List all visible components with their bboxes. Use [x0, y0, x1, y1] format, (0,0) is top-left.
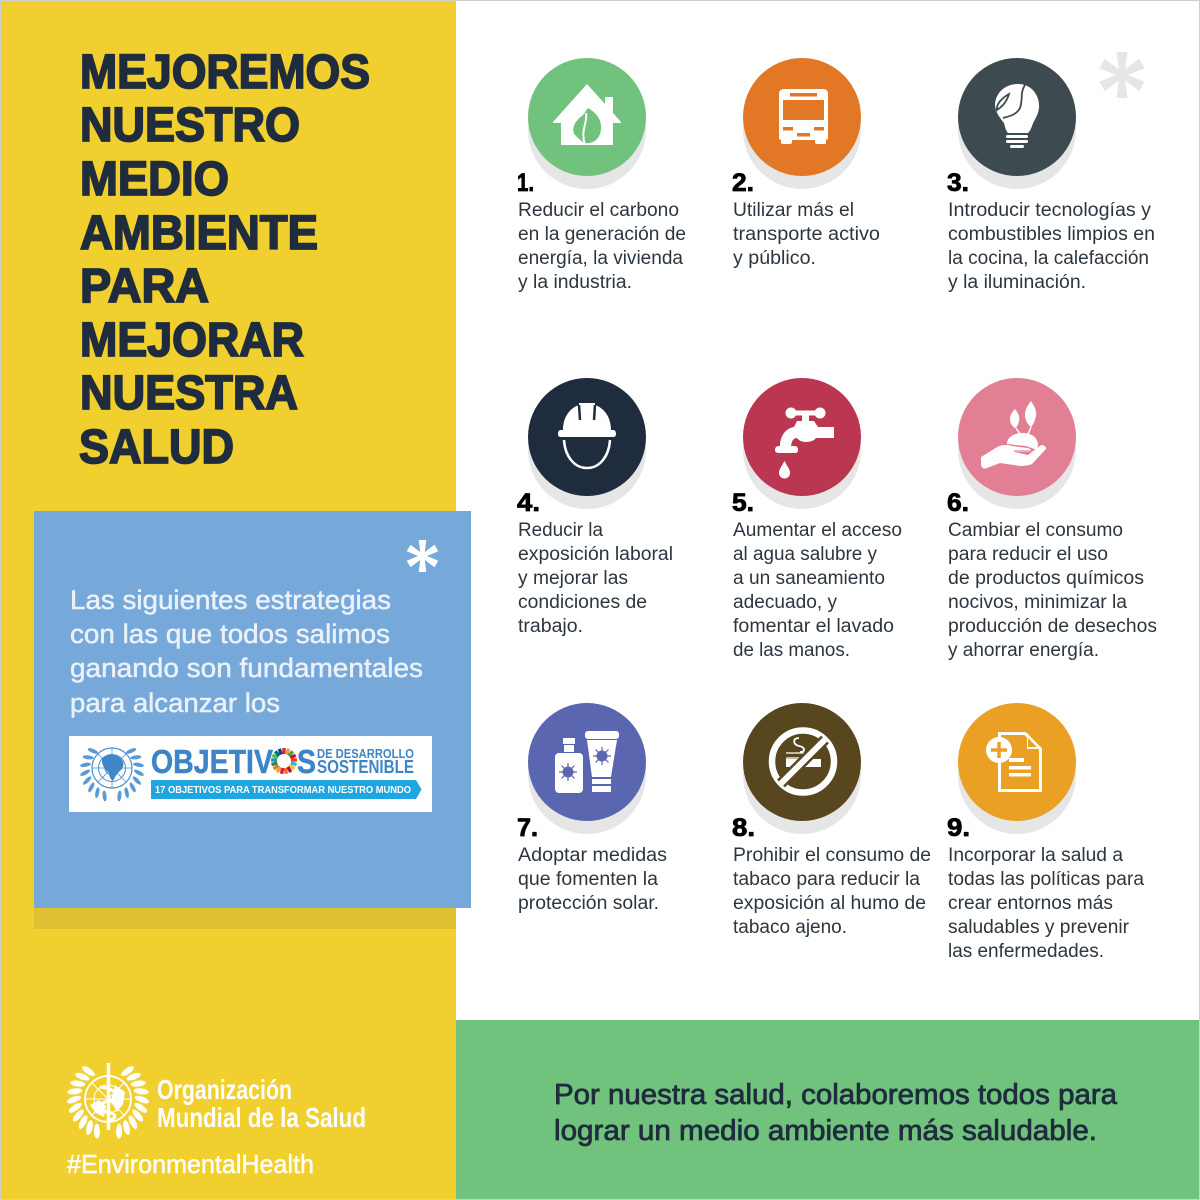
intro text: con las que todos salimos — [70, 619, 390, 649]
text 5: de las manos. — [733, 640, 850, 661]
text 8: Prohibir el consumo de — [733, 845, 931, 866]
text 5: Aumentar el acceso — [733, 520, 902, 541]
icon: document with medical cross — [986, 733, 1042, 790]
logo arrow ribbon — [151, 780, 422, 799]
title: MEJORAR — [80, 314, 304, 367]
title — [79, 46, 370, 474]
text 8 — [733, 845, 931, 938]
item 4: workplace exposure — [517, 378, 673, 637]
icon: house with leaf — [553, 84, 621, 145]
intro text: para alcanzar los — [70, 688, 280, 718]
text 5: adecuado, y — [733, 592, 837, 613]
text 9: todas las políticas para — [948, 869, 1144, 890]
text 6: de productos químicos — [948, 568, 1144, 589]
icon: leaf light bulb — [995, 84, 1039, 148]
text 7: Adoptar medidas — [518, 845, 667, 866]
icon: hand holding seedling — [981, 401, 1046, 469]
icon: sunscreen bottle and tube — [555, 731, 619, 793]
text 1: y la industria. — [518, 272, 632, 293]
icon: UN emblem — [79, 747, 145, 802]
logo wordmark: S — [297, 743, 316, 780]
text 3: y la iluminación. — [948, 272, 1086, 293]
logo arrow ribbon: 17 OBJETIVOS PARA TRANSFORMAR NUESTRO MUNDO — [155, 785, 411, 796]
text 8: tabaco ajeno. — [733, 917, 847, 938]
item 7: sun protection — [517, 703, 667, 914]
title: SALUD — [79, 421, 234, 474]
number 4: 4. — [517, 489, 540, 517]
title: NUESTRA — [80, 367, 298, 420]
text 4: exposición laboral — [518, 544, 673, 565]
text 2: Utilizar más el — [733, 200, 854, 221]
item 3: clean technology — [947, 58, 1155, 293]
number 3: 3. — [947, 169, 969, 197]
number 7: 7. — [517, 814, 538, 842]
text 1 — [518, 200, 686, 293]
logo wordmark: SOSTENIBLE — [317, 757, 414, 777]
item 6: chemicals and waste — [947, 378, 1157, 661]
title: AMBIENTE — [80, 207, 318, 260]
text 3 — [948, 200, 1155, 293]
logo wordmark — [151, 743, 414, 780]
item 5: water and sanitation — [732, 378, 902, 661]
icon: WHO emblem — [66, 1063, 150, 1139]
text 2: transporte activo — [733, 224, 880, 245]
panel: yellow left column — [0, 0, 456, 1200]
WHO name: Mundial de la Salud — [157, 1102, 366, 1133]
text 3: combustibles limpios en — [948, 224, 1155, 245]
hashtag: #EnvironmentalHealth — [67, 1149, 314, 1179]
icon: no smoking sign — [772, 730, 834, 792]
title: MEJOREMOS — [80, 46, 370, 99]
text 4: trabajo. — [518, 616, 583, 637]
text 6 — [948, 520, 1157, 661]
WHO name: Organización — [157, 1074, 292, 1105]
intro text — [70, 585, 423, 718]
text 9: saludables y prevenir — [948, 917, 1130, 938]
text 5 — [733, 520, 902, 661]
text 1: en la generación de — [518, 224, 686, 245]
text 7: protección solar. — [518, 893, 659, 914]
item 8: tobacco ban — [732, 703, 931, 938]
icon: hard hat — [558, 403, 616, 468]
title: MEDIO — [80, 153, 229, 206]
icon: water tap and drop — [775, 408, 834, 478]
text 9: Incorporar la salud a — [948, 845, 1123, 866]
icon: white asterisk — [407, 540, 438, 572]
text 5: a un saneamiento — [733, 568, 885, 589]
text 9 — [948, 845, 1144, 962]
text 6: y ahorrar energía. — [948, 640, 1099, 661]
closing message: lograr un medio ambiente más saludable. — [554, 1115, 1097, 1147]
intro text: Las siguientes estrategias — [70, 585, 391, 615]
title: PARA — [80, 260, 209, 313]
text 6: producción de desechos — [948, 616, 1157, 637]
text 4: condiciones de — [518, 592, 647, 613]
panel shadow — [34, 908, 456, 929]
item 1: carbon reduction — [517, 58, 686, 293]
number 1: 1. — [517, 169, 534, 197]
text 6: nocivos, minimizar la — [948, 592, 1127, 613]
text 9: las enfermedades. — [948, 941, 1104, 962]
panel: blue intro box — [34, 511, 471, 908]
intro text: ganando son fundamentales — [70, 653, 423, 683]
text 4 — [518, 520, 673, 637]
title: NUESTRO — [80, 99, 300, 152]
number 9: 9. — [947, 814, 970, 842]
icon: grey asterisk — [1099, 52, 1145, 98]
text 9: crear entornos más — [948, 893, 1113, 914]
number 6: 6. — [947, 489, 969, 517]
logo wordmark: OBJETIV — [151, 743, 273, 780]
text 1: Reducir el carbono — [518, 200, 679, 221]
number 5: 5. — [732, 489, 754, 517]
closing message: Por nuestra salud, colaboremos todos para — [554, 1079, 1118, 1111]
icon: SDG colour wheel — [271, 748, 297, 774]
text 6: para reducir el uso — [948, 544, 1108, 565]
panel: green closing band — [456, 1020, 1200, 1200]
item 9: health in all policies — [947, 703, 1144, 962]
text 7 — [518, 845, 667, 914]
icon: bus — [779, 89, 828, 144]
item 2: transport — [732, 58, 880, 269]
text 7: que fomenten la — [518, 869, 658, 890]
text 2 — [733, 200, 880, 269]
WHO name — [157, 1074, 366, 1133]
text 4: Reducir la — [518, 520, 603, 541]
text 3: la cocina, la calefacción — [948, 248, 1149, 269]
logo wordmark: DE DESARROLLO — [317, 746, 414, 761]
text 6: Cambiar el consumo — [948, 520, 1123, 541]
number 8: 8. — [732, 814, 755, 842]
SDG logo banner — [69, 736, 432, 812]
text 8: exposición al humo de — [733, 893, 926, 914]
text 1: energía, la vivienda — [518, 248, 683, 269]
number 2: 2. — [732, 169, 754, 197]
closing message — [554, 1079, 1118, 1147]
text 3: Introducir tecnologías y — [948, 200, 1152, 221]
text 8: tabaco para reducir la — [733, 869, 920, 890]
text 4: y mejorar las — [518, 568, 628, 589]
text 2: y público. — [733, 248, 816, 269]
text 5: fomentar el lavado — [733, 616, 894, 637]
text 5: al agua salubre y — [733, 544, 877, 565]
